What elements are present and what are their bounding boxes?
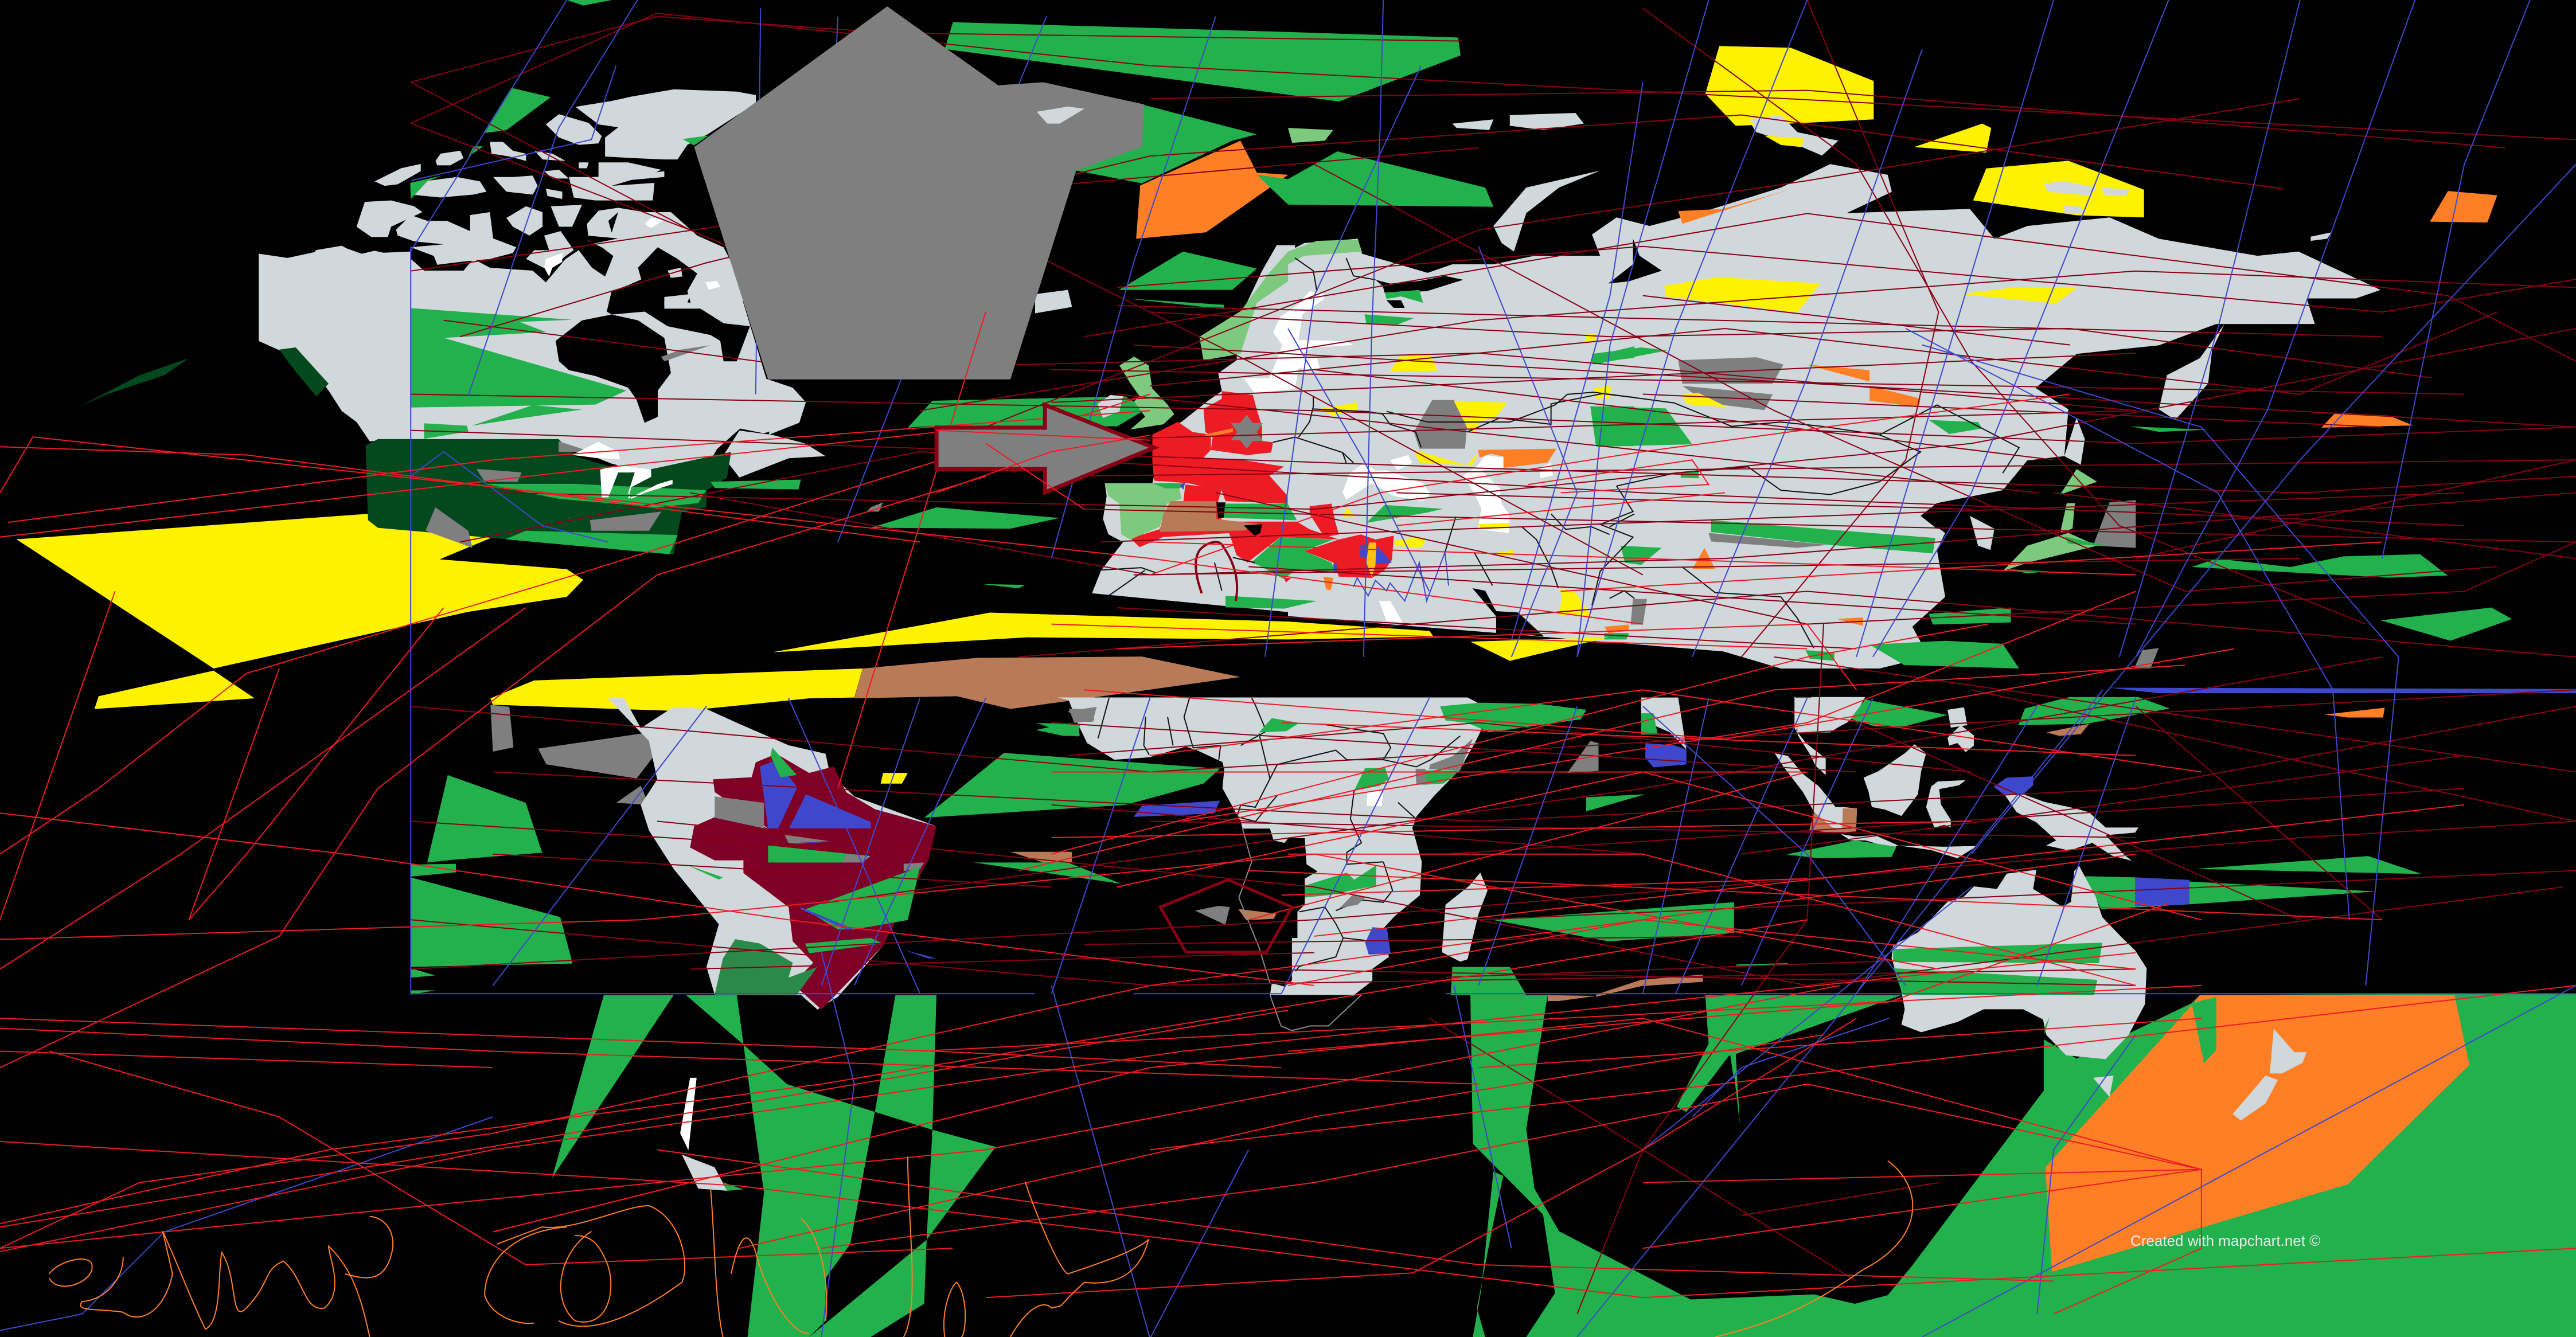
land: Eurasia east of Europe xyxy=(1288,113,2380,668)
long blue bar east of the Indian Ocean xyxy=(2109,687,2576,693)
Scandinavia and Svalbard xyxy=(1199,252,1288,360)
grey pentagon over Greenland xyxy=(694,6,1144,380)
scribbles: dark red and blue over the Middle East xyxy=(1196,542,1449,601)
large ocean polygons: north-west xyxy=(17,0,1493,668)
land: South-East Asia and Australia xyxy=(1775,697,2146,1059)
land: Newfoundland, Iceland and Alaska fragments xyxy=(78,290,1072,478)
handwritten scribbles in orange xyxy=(49,1156,1913,1337)
overlay shapes: United States xyxy=(365,439,801,554)
large ocean polygons: south-east xyxy=(1451,707,2576,1337)
route lines: bright red xyxy=(0,394,2576,1314)
overlay shapes: Russia, Asia and the Arctic xyxy=(1288,46,2512,668)
national borders: Africa xyxy=(1098,698,1460,971)
overlay: Great Lakes xyxy=(572,442,673,499)
outlined dark red pentagon xyxy=(1160,879,1292,952)
routes crossing the arrow xyxy=(936,431,1150,509)
Africa coast outline xyxy=(1239,828,1361,1031)
national borders: Central and East Asia xyxy=(1387,392,2019,648)
land: Europe and the Middle East xyxy=(1092,245,1553,636)
land: Canada and northern USA xyxy=(315,89,806,478)
overlay shapes: Canada xyxy=(410,88,711,439)
overlay shapes: South-East Asia and Australia xyxy=(1720,697,2189,1078)
red route crossing the pentagon xyxy=(838,312,986,788)
Greenland fragment xyxy=(1037,107,1084,124)
land: South America xyxy=(608,698,936,1191)
land: Africa and Madagascar xyxy=(1058,697,1491,995)
credit text: Created with mapchart.net © xyxy=(2130,1232,2320,1249)
land: India tip and Indochina xyxy=(1641,698,1863,749)
large ocean polygons: southern Atlantic xyxy=(95,656,1240,1337)
overlay shapes: Western Europe and Middle East xyxy=(1098,290,1634,616)
overlay shapes: Africa xyxy=(1036,703,1586,955)
land: Alaska-Canada block xyxy=(259,247,411,441)
land: Tasmania and New Zealand xyxy=(1641,713,2306,1120)
overlay shapes: South America xyxy=(686,707,1096,1191)
arrow pointing to Western Europe xyxy=(936,405,1154,492)
national borders xyxy=(1098,258,1634,599)
